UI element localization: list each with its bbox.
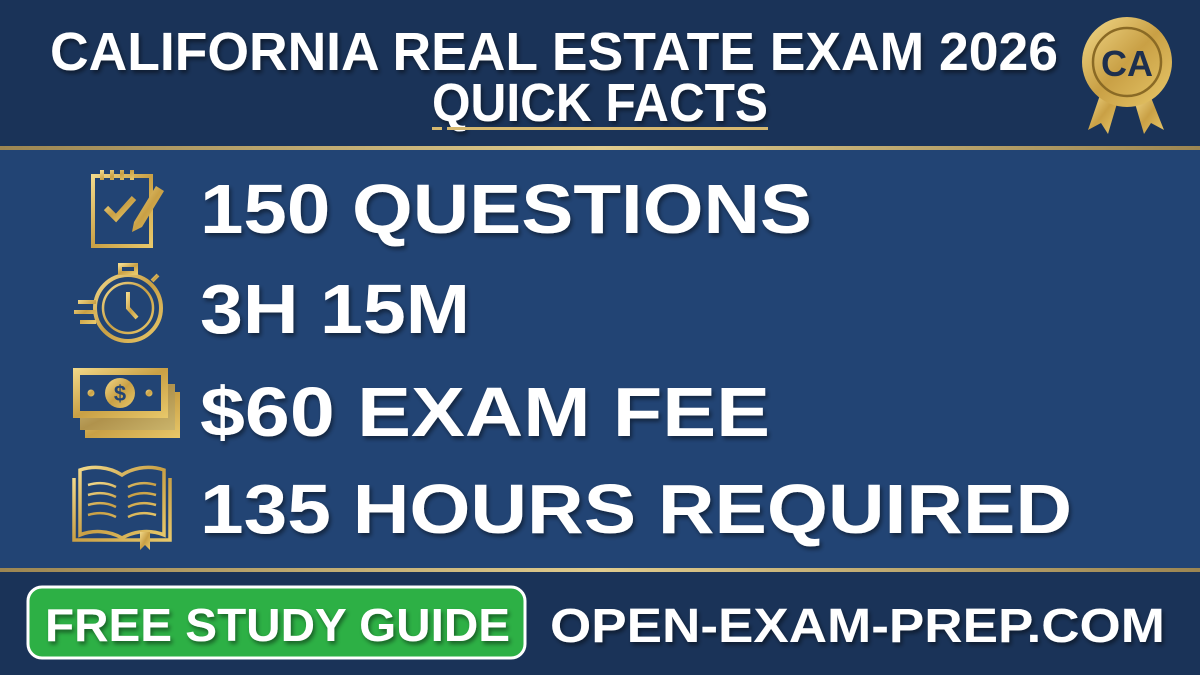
icon: notepad checklist (93, 170, 164, 246)
icon: money stack (73, 368, 180, 438)
badge: CA seal (1082, 17, 1172, 134)
icon: money stack: $ (114, 381, 126, 406)
button: free study guide (28, 587, 525, 658)
fact: 3h 15m: 3H 15M (200, 270, 470, 348)
middle panel (0, 150, 1200, 568)
footer band (0, 572, 1200, 675)
subtitle: quick facts: QUICK FACTS (432, 73, 768, 133)
button: free study guide: FREE STUDY GUIDE (45, 599, 510, 651)
header band (0, 0, 1200, 147)
website url: OPEN-EXAM-PREP.COM (550, 600, 1165, 653)
fact: hours required: 135 HOURS REQUIRED (200, 470, 1072, 548)
fact: 150 questions: 150 QUESTIONS (200, 170, 812, 248)
icon: open book (74, 467, 170, 550)
fact: exam fee: $60 EXAM FEE (200, 373, 770, 451)
title: CALIFORNIA REAL ESTATE EXAM 2026 (50, 22, 1058, 82)
badge: CA seal: CA (1101, 43, 1153, 84)
icon: stopwatch (74, 265, 161, 341)
